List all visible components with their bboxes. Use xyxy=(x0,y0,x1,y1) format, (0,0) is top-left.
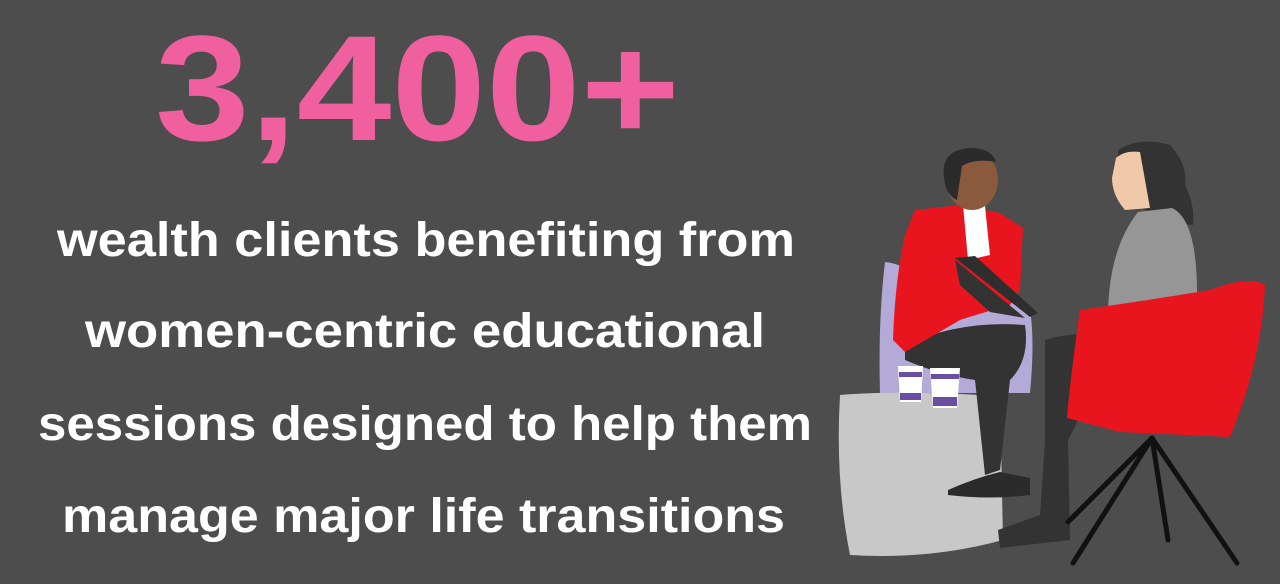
woman 1 head xyxy=(944,148,998,210)
lavender chair xyxy=(880,262,1032,393)
headline number: 3,400+ xyxy=(155,4,680,172)
tablet xyxy=(955,256,1038,317)
description text: sessions designed to help them xyxy=(38,398,812,451)
white top xyxy=(963,205,990,260)
illustration: two women talking xyxy=(839,141,1265,563)
woman 2 sweater xyxy=(1095,208,1197,345)
woman 2 legs xyxy=(998,334,1100,548)
woman 1 jacket xyxy=(893,205,1023,352)
description text: manage major life transitions xyxy=(62,490,785,543)
coffee cups xyxy=(898,366,960,408)
description text: wealth clients benefiting from xyxy=(56,214,795,267)
description text xyxy=(38,214,812,543)
woman 2 hair xyxy=(1118,141,1193,225)
red chair xyxy=(1067,281,1265,437)
ottoman xyxy=(839,393,1003,556)
chair legs xyxy=(1068,438,1237,563)
woman 2 face xyxy=(1112,152,1150,210)
woman 1 legs xyxy=(905,324,1026,475)
description text: women-centric educational xyxy=(84,305,765,358)
woman 1 shoe xyxy=(948,472,1030,498)
